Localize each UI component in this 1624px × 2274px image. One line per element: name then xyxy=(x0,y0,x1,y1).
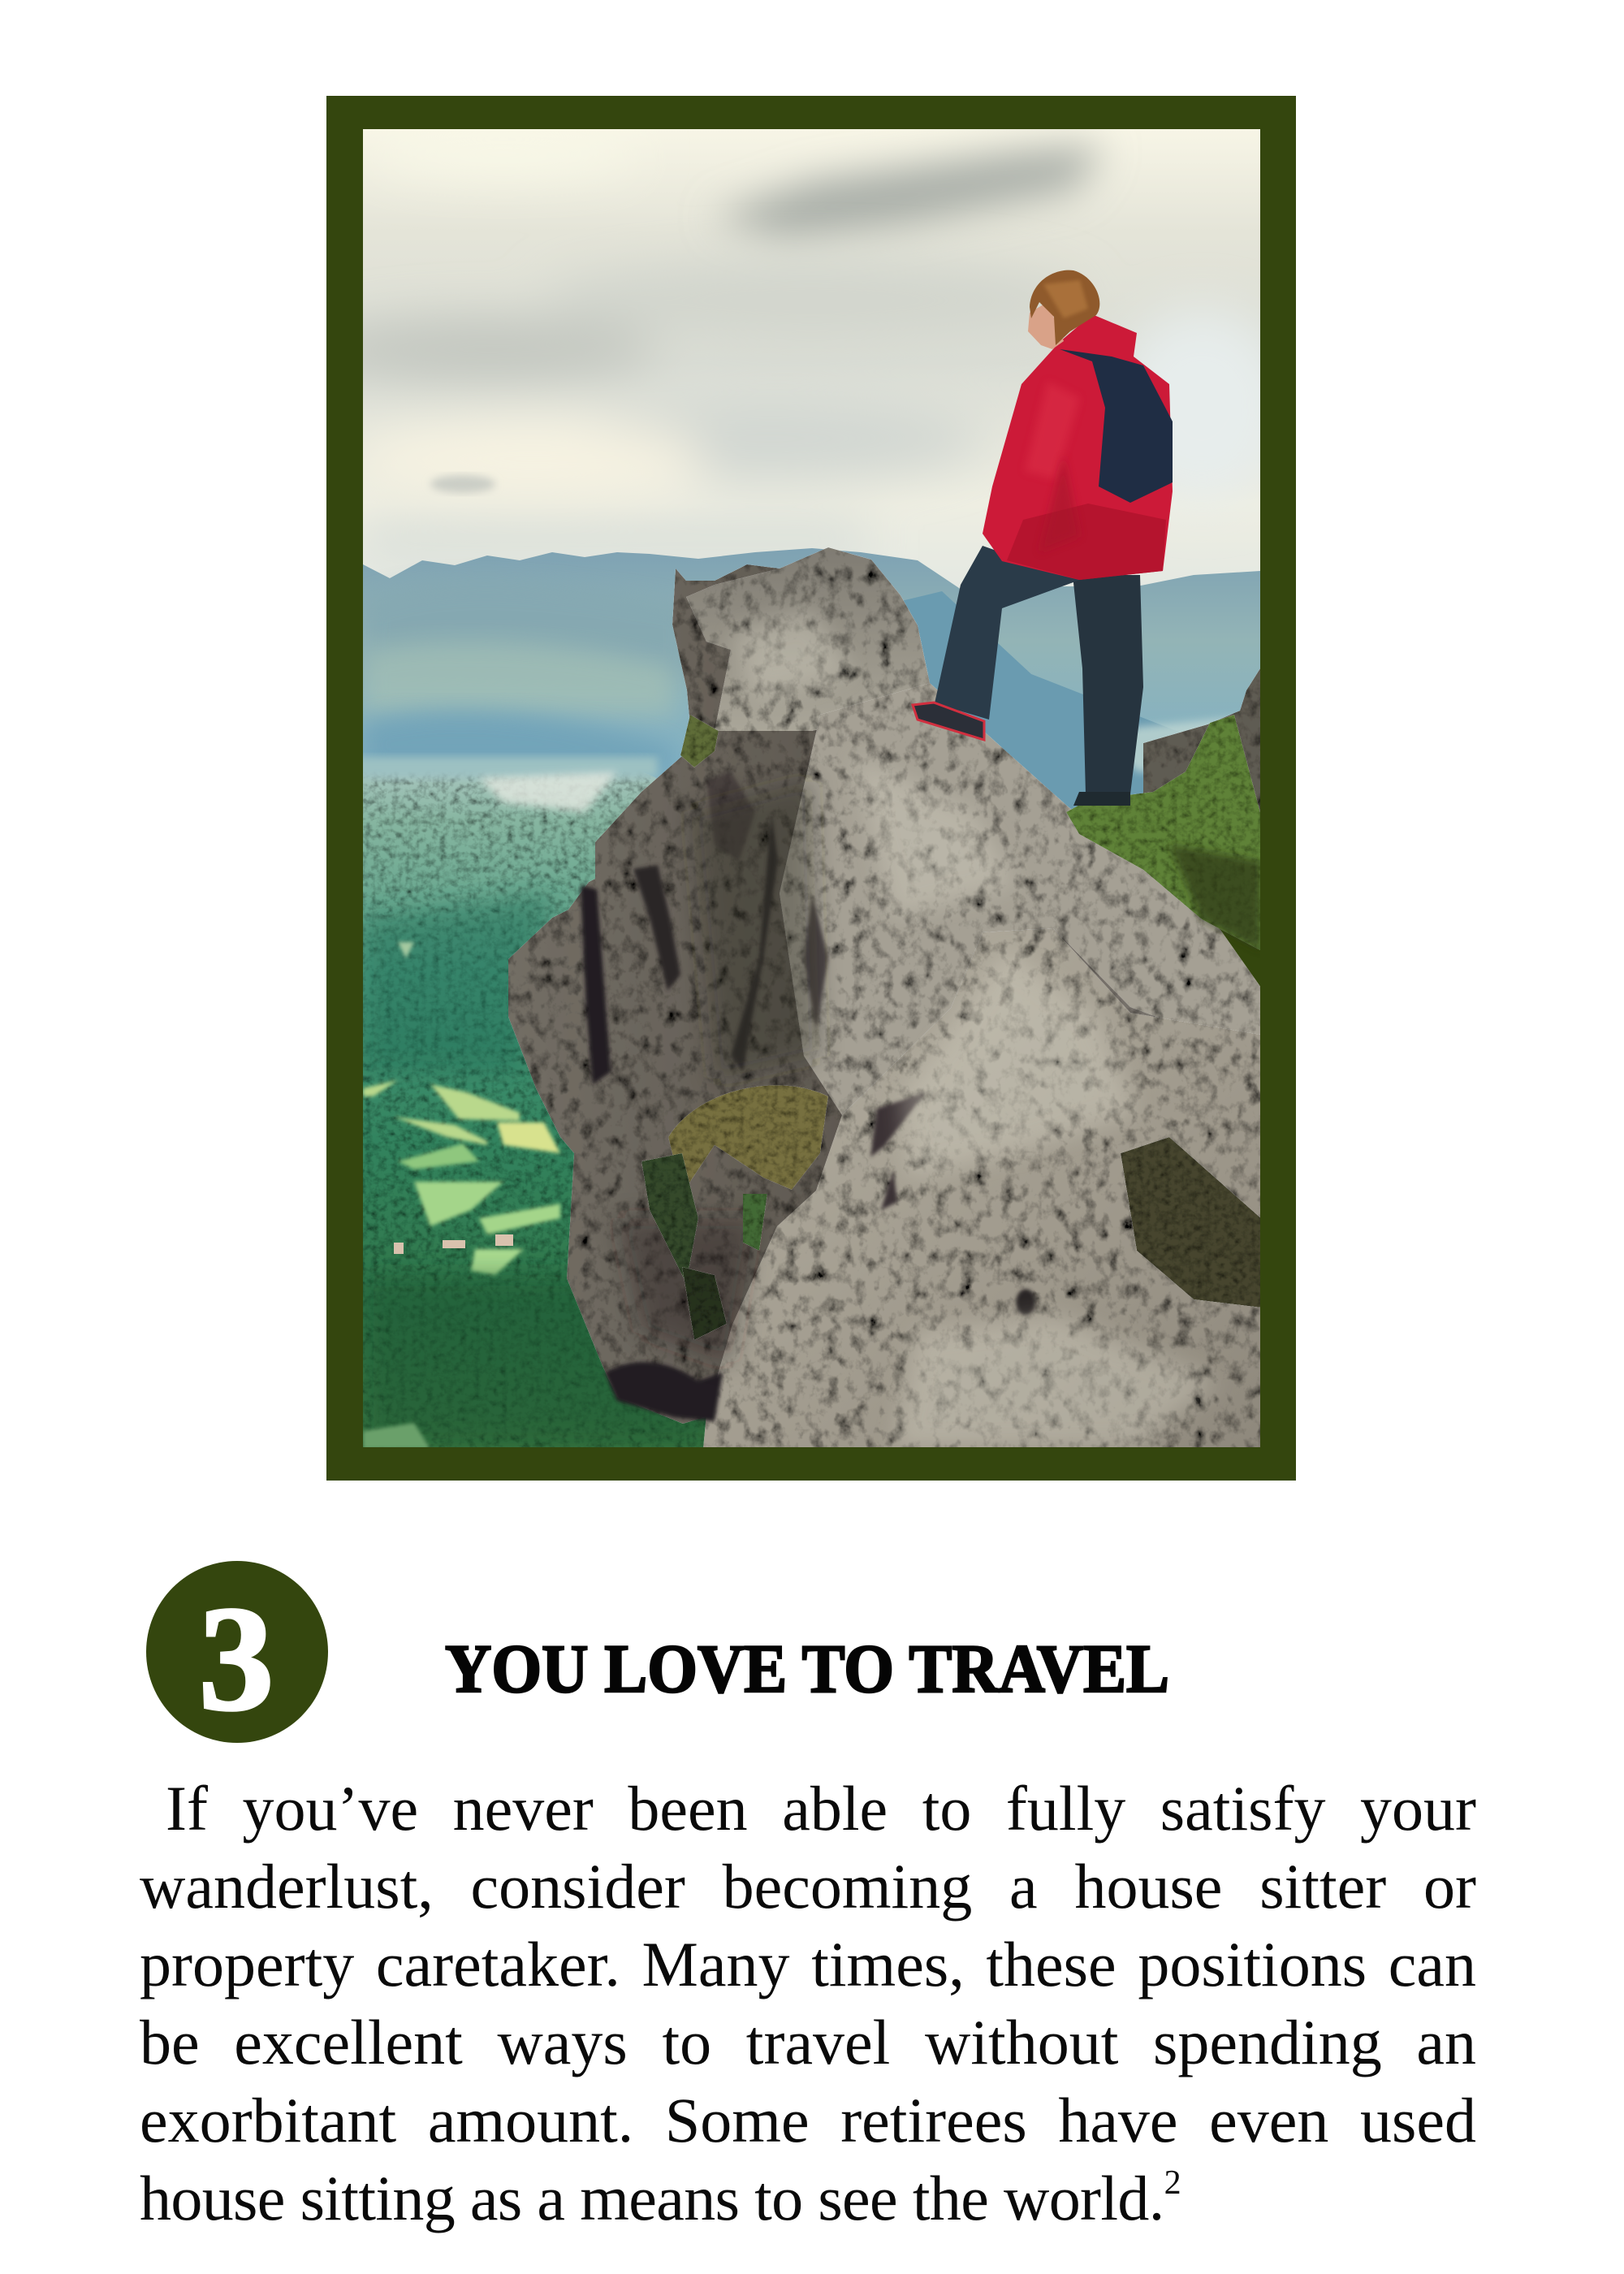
face xyxy=(1028,302,1064,349)
backpack xyxy=(1060,349,1173,503)
body paragraph: If you’ve never been able to fully satisfy your xyxy=(166,1773,1476,1844)
green valley with fields xyxy=(349,757,731,1449)
right rocks and grass slope xyxy=(1066,668,1260,950)
body paragraph xyxy=(140,1773,1476,2233)
body paragraph: property caretaker. Many times, these positions can xyxy=(140,1929,1476,1999)
front shoe xyxy=(913,703,984,740)
back leg xyxy=(1073,575,1143,794)
body paragraph: exorbitant amount. Some retirees have even used xyxy=(140,2085,1476,2155)
distant mountains xyxy=(363,548,1260,812)
hiker xyxy=(913,270,1173,806)
upper rock lit face xyxy=(686,547,930,731)
sky with clouds xyxy=(363,129,1260,589)
photo frame xyxy=(326,96,1296,1481)
right big boulder xyxy=(703,928,1261,1449)
grass tufts on rock xyxy=(641,715,1261,1340)
back shoe xyxy=(1073,792,1130,806)
body paragraph: wanderlust, consider becoming a house sitter or xyxy=(140,1851,1476,1922)
number badge xyxy=(146,1561,328,1743)
main rock cliff xyxy=(508,547,1261,1449)
numeral 3: 3 xyxy=(199,1576,274,1741)
rock highlights xyxy=(731,609,1218,1449)
red jacket xyxy=(983,314,1173,580)
photo: hiker on mountain rock xyxy=(317,129,1291,1449)
body paragraph: be excellent ways to travel without spending an xyxy=(140,2007,1476,2077)
body paragraph: house sitting as a means to see the world.2 xyxy=(140,2163,1181,2233)
mid rock lit face xyxy=(780,683,1261,1115)
rock crevices xyxy=(581,772,1035,1421)
front leg xyxy=(935,546,1080,720)
hair xyxy=(1030,270,1099,345)
heading: YOU LOVE TO TRAVEL xyxy=(445,1631,1169,1707)
